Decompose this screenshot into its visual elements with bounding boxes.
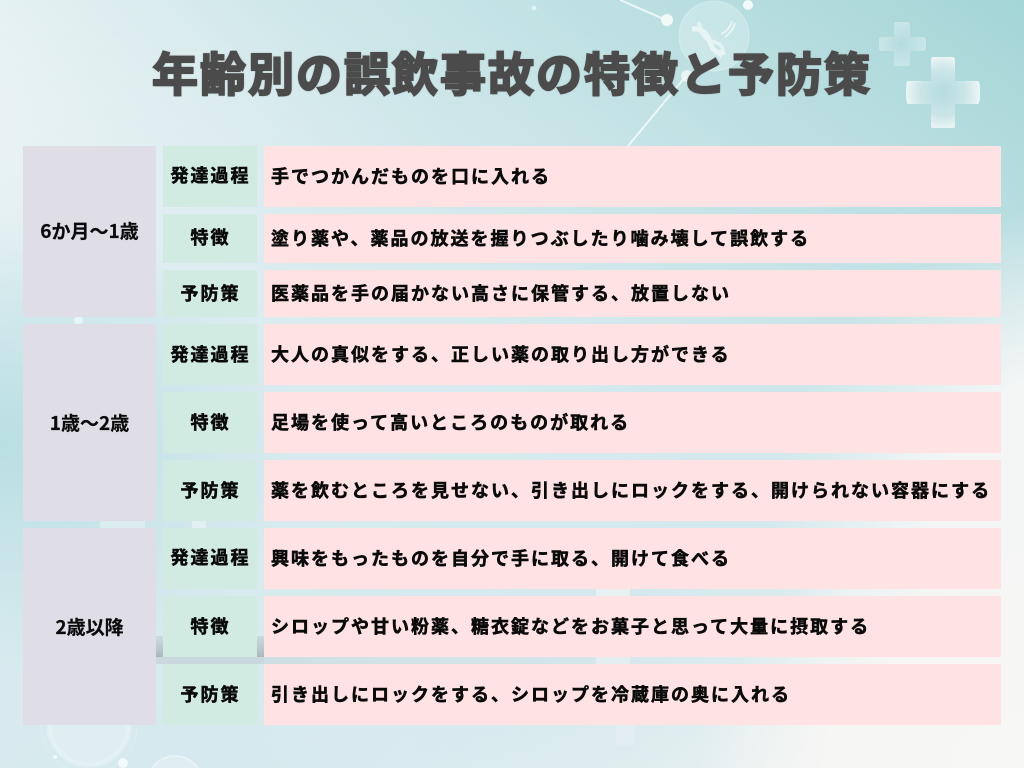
- text: characteristics row 2: [264, 392, 1001, 453]
- text: characteristics row 3: [264, 596, 1001, 657]
- label: prevention row 1: [163, 270, 257, 317]
- text: prevention row 2: [264, 460, 1001, 521]
- label: development row 3: 発達過程: [170, 548, 250, 568]
- text: prevention row 3: [264, 664, 1001, 725]
- panel: age 6 months to 1 year: [23, 146, 156, 317]
- label: characteristics row 2: [163, 392, 257, 453]
- text: prevention row 3: 引き出しにロックをする、シロップを冷蔵庫の奥に入れる: [271, 684, 791, 704]
- label: characteristics row 1: [163, 214, 257, 263]
- text: development row 3: [264, 528, 1001, 589]
- label: characteristics row 3: 特徴: [190, 616, 230, 636]
- panel: age 6 months to 1 year: 6か月～1歳: [40, 217, 139, 244]
- panel: age 1 to 2 years: [23, 324, 156, 521]
- label: prevention row 2: [163, 460, 257, 521]
- text: prevention row 1: [264, 270, 1001, 317]
- label: prevention row 2: 予防策: [180, 480, 240, 500]
- label: development row 1: [163, 146, 257, 206]
- text: characteristics row 1: [264, 214, 1001, 263]
- label: prevention row 1: 予防策: [180, 284, 240, 304]
- label: development row 2: 発達過程: [170, 344, 250, 364]
- label: development row 2: [163, 324, 257, 385]
- label: characteristics row 1: 特徴: [190, 228, 230, 248]
- text: prevention row 2: 薬を飲むところを見せない、引き出しにロックをする、開けられない容器にする: [271, 480, 991, 500]
- panel: age 1 to 2 years: 1歳～2歳: [50, 409, 129, 436]
- label: prevention row 3: [163, 664, 257, 725]
- panel: age 2 years and older: [23, 528, 156, 725]
- text: characteristics row 1: 塗り薬や、薬品の放送を握りつぶしたり噛み壊して誤飲する: [271, 229, 810, 249]
- text: development row 1: [264, 146, 1001, 206]
- label: development row 1: 発達過程: [170, 166, 250, 186]
- panel: age 2 years and older: 2歳以降: [55, 613, 124, 640]
- text: development row 2: 大人の真似をする、正しい薬の取り出し方ができる: [271, 344, 731, 364]
- label: prevention row 3: 予防策: [180, 684, 240, 704]
- label: characteristics row 3: [163, 596, 257, 657]
- label: development row 3: [163, 528, 257, 589]
- title: 年齢別の誤飲事故の特徴と予防策: [152, 49, 872, 101]
- text: prevention row 1: 医薬品を手の届かない高さに保管する、放置しない: [271, 284, 731, 304]
- text: development row 2: [264, 324, 1001, 385]
- label: characteristics row 2: 特徴: [190, 412, 230, 432]
- text: development row 1: 手でつかんだものを口に入れる: [271, 167, 551, 187]
- text: development row 3: 興味をもったものを自分で手に取る、開けて食べる: [271, 548, 731, 568]
- text: characteristics row 2: 足場を使って高いところのものが取れる: [271, 412, 630, 432]
- text: characteristics row 3: シロップや甘い粉薬、糖衣錠などをお菓子と思って大量に摂取する: [271, 616, 870, 636]
